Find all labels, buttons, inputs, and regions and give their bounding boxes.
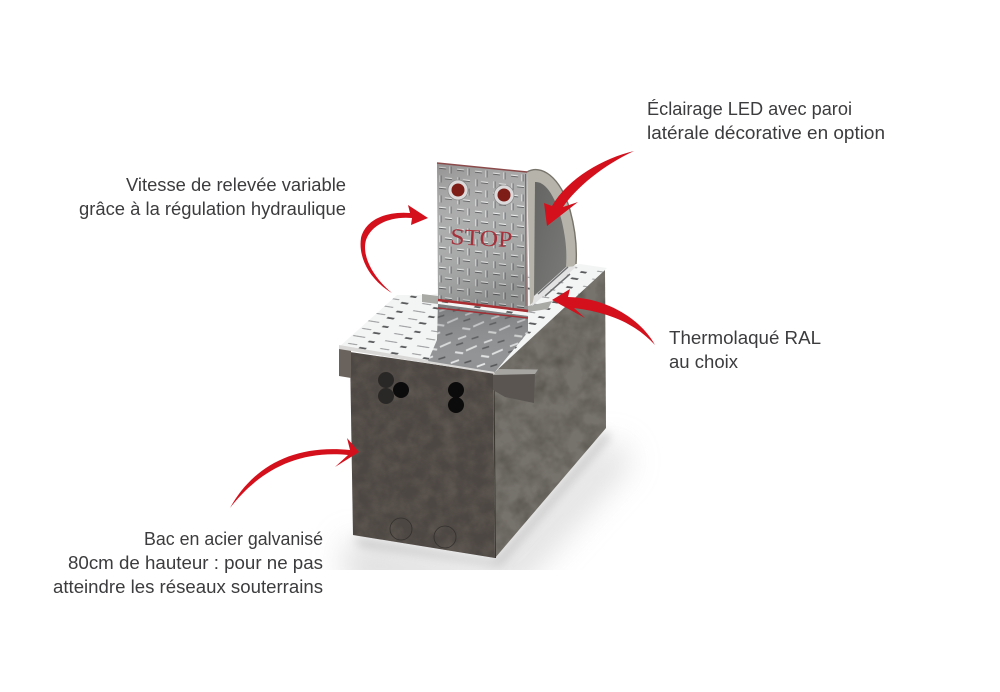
left flange [339, 347, 351, 378]
text: variable speed: grâce à la régulation hydraulique [79, 199, 346, 219]
cable holes [378, 372, 464, 413]
text: LED lighting: Éclairage LED avec paroi [647, 99, 852, 119]
arrow: LED lighting [544, 151, 634, 226]
chequer plate lid [339, 264, 607, 372]
text: galvanised tank [53, 529, 323, 597]
text: galvanised tank: atteindre les réseaux souterrains [53, 577, 323, 597]
drain circles [390, 518, 456, 548]
column front panel [437, 163, 528, 318]
column foot bar [422, 294, 552, 312]
product: galvanised steel tank [339, 163, 607, 558]
text: thermolacquered: Thermolaqué RAL [669, 328, 821, 348]
tank right side [493, 270, 606, 558]
text: galvanised tank: Bac en acier galvanisé [144, 529, 323, 549]
text: thermolacquered [669, 328, 821, 372]
arrow: galvanised tank [230, 438, 359, 508]
text: variable speed [79, 175, 346, 219]
lid front lip [339, 345, 495, 374]
arch side of column [527, 170, 577, 306]
LED lights [448, 180, 514, 205]
text: LED lighting [647, 99, 885, 143]
arrow: variable speed [361, 205, 428, 293]
reflection of column on lid [428, 304, 528, 372]
tank front face [350, 352, 495, 558]
tank edge [494, 373, 496, 558]
right flange [493, 369, 538, 403]
arrow: thermolacquered [552, 289, 655, 345]
text: galvanised tank: 80cm de hauteur : pour ne pas [68, 553, 323, 573]
STOP lettering: STOP [450, 224, 513, 252]
text: thermolacquered: au choix [669, 352, 738, 372]
floor shadow [345, 430, 632, 590]
text: LED lighting: latérale décorative en option [647, 123, 885, 143]
text: variable speed: Vitesse de relevée variable [126, 175, 346, 195]
